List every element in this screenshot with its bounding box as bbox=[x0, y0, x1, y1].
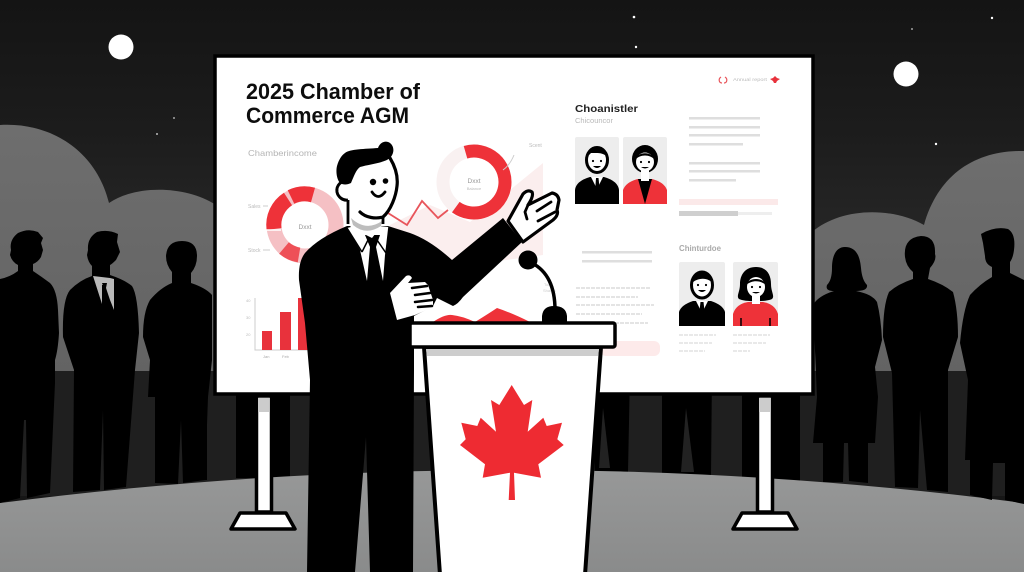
speaker front hand bbox=[390, 275, 433, 320]
bar chart: Feb bbox=[282, 354, 290, 359]
podium bbox=[410, 323, 615, 572]
silhouette: man right bbox=[960, 228, 1024, 504]
podium top bbox=[410, 323, 615, 347]
screen stand left bbox=[231, 396, 295, 529]
screen title: Commerce AGM bbox=[246, 103, 409, 128]
night sky background bbox=[0, 0, 1024, 372]
silhouette: person 2 bbox=[63, 231, 139, 492]
bar chart: Jan bbox=[263, 354, 269, 359]
heading: councillors: Chinturdoe bbox=[679, 243, 721, 253]
progress bars bbox=[679, 199, 778, 216]
stars and moons bbox=[108, 16, 993, 145]
silhouette: person 3 bbox=[143, 241, 212, 484]
subheading: chancellor: Chicouncor bbox=[575, 118, 614, 125]
silhouette: woman bbox=[813, 247, 882, 483]
portrait card: woman top bbox=[623, 137, 667, 204]
speaker ear bbox=[337, 181, 349, 200]
screen stand right bbox=[733, 396, 797, 529]
donut chart left: Stock bbox=[248, 248, 261, 254]
neck shadow bbox=[351, 218, 382, 231]
text lines: middle block: Shares bbox=[543, 288, 556, 293]
donut chart right: Balance bbox=[467, 186, 482, 191]
donut chart left: Dxxt bbox=[298, 224, 312, 231]
speaker eyes bbox=[370, 178, 388, 185]
speaker neck outlines bbox=[348, 200, 383, 224]
silhouette: person 1 bbox=[0, 230, 59, 503]
speaker neck and face bbox=[343, 158, 397, 238]
bar chart: 30 bbox=[246, 315, 251, 320]
speaker collar lines bbox=[347, 227, 389, 253]
speaker hair bbox=[336, 142, 393, 184]
text lines: right block bbox=[689, 117, 760, 182]
speaker smile bbox=[372, 192, 385, 196]
line chart bbox=[388, 201, 448, 225]
speaker face outline bbox=[360, 158, 397, 218]
audience left group bbox=[0, 230, 212, 503]
podium body bbox=[424, 347, 601, 572]
speaker bbox=[299, 142, 559, 572]
bar chart bbox=[246, 298, 315, 359]
speaker suit and legs bbox=[299, 218, 522, 572]
microphone bbox=[518, 250, 567, 323]
speaker tie bbox=[365, 235, 383, 290]
screen subheading: Chamberincome bbox=[248, 148, 317, 158]
area chart bbox=[390, 163, 543, 265]
portrait card: man top bbox=[575, 137, 619, 204]
captions under portraits bbox=[679, 335, 770, 351]
portrait card: man bottom bbox=[679, 262, 725, 326]
floor stage bbox=[0, 470, 1024, 572]
donut chart left bbox=[248, 194, 336, 256]
pink callout bar bbox=[600, 341, 660, 356]
top right logo row bbox=[719, 76, 780, 83]
donut chart right bbox=[443, 143, 542, 213]
screen title: 2025 Chamber of bbox=[246, 79, 421, 104]
speaker raised hand bbox=[508, 191, 559, 242]
bar chart: 20 bbox=[246, 332, 251, 337]
speaker shirt bbox=[347, 226, 389, 281]
audience right group bbox=[813, 228, 1024, 504]
bar chart: 40 bbox=[246, 298, 251, 303]
donut chart left: Sales bbox=[248, 204, 261, 210]
text lines: middle block bbox=[543, 251, 654, 323]
top right logo row: Annual report bbox=[733, 77, 768, 82]
podium shadow band bbox=[426, 349, 599, 356]
donut chart right: Dxxt bbox=[468, 178, 481, 185]
background hills bbox=[0, 125, 1024, 372]
donut chart right: Scent bbox=[529, 143, 542, 149]
portrait card: woman bottom bbox=[733, 262, 778, 326]
silhouette: man centre bbox=[883, 236, 958, 492]
icon: maple leaf bbox=[460, 385, 564, 500]
presentation screen bbox=[215, 56, 813, 394]
text lines: middle block: Total bbox=[544, 282, 553, 287]
heading: chancellor: Choanistler bbox=[575, 103, 638, 115]
back wall with dark columns bbox=[0, 371, 1024, 496]
red mountain chart bbox=[433, 308, 530, 322]
